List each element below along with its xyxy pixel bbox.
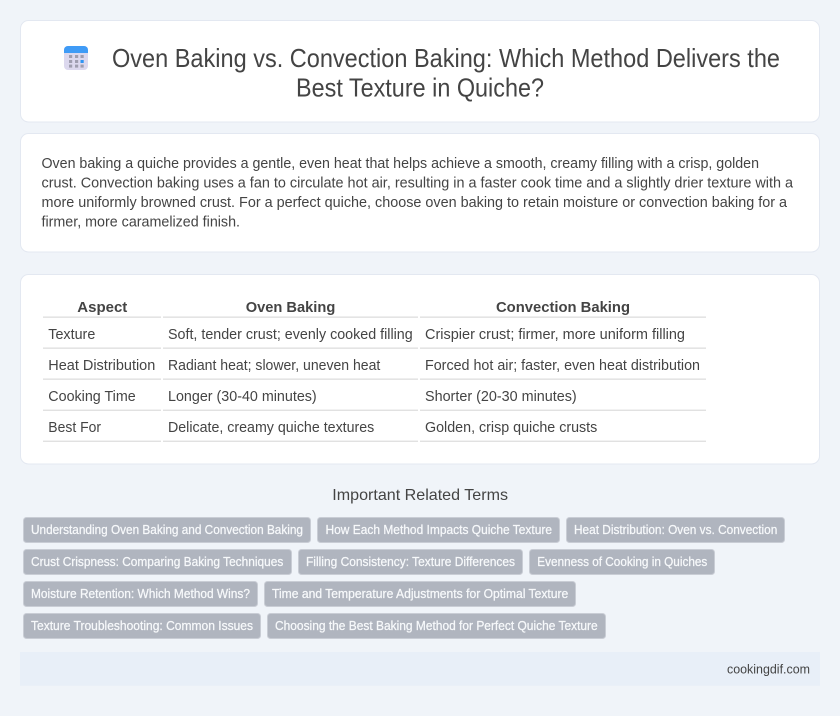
table header: Oven Baking: [246, 299, 335, 316]
table header: [77, 299, 630, 316]
chip row 2: Evenness of Cooking in Quiches: [537, 554, 707, 569]
chip row 1: How Each Method Impacts Quiche Texture: [326, 522, 552, 537]
row: heat distribution: Radiant heat; slower, uneven heat: [168, 358, 380, 374]
title: Best Texture in Quiche?: [296, 74, 544, 102]
related term chips: [24, 518, 784, 638]
row: best for: Delicate, creamy quiche textures: [168, 420, 374, 436]
chip row 3: Moisture Retention: Which Method Wins?: [31, 586, 250, 601]
chip row 4: Choosing the Best Baking Method for Perfect Quiche Texture: [275, 618, 598, 633]
panel: summary text: more uniformly browned crust. For a perfect quiche, choose oven baking to retain moisture or convection baking for a: [42, 195, 787, 211]
icon: calendar: [64, 46, 88, 70]
row: texture: Soft, tender crust; evenly cooked filling: [168, 327, 413, 343]
footer bar: cookingdif.com: [727, 661, 810, 676]
chip row 2: Filling Consistency: Texture Differences: [306, 554, 515, 569]
table header: Aspect: [77, 299, 127, 316]
row: cooking time: Longer (30-40 minutes): [168, 389, 317, 405]
chip row 3: [24, 582, 576, 606]
row: cooking time: Shorter (20-30 minutes): [425, 389, 577, 405]
heading: related terms: Important Related Terms: [332, 487, 508, 504]
panel: summary text: firmer, more caramelized finish.: [42, 214, 240, 230]
chip row 2: Crust Crispness: Comparing Baking Techniques: [31, 554, 283, 569]
row: heat distribution: Forced hot air; faster, even heat distribution: [425, 358, 700, 374]
row: best for: [48, 420, 597, 436]
row: cooking time: [48, 389, 577, 405]
row: heat distribution: Heat Distribution: [48, 358, 155, 374]
row: texture: [48, 327, 685, 343]
row: best for: Best For: [48, 420, 101, 436]
row: texture: Crispier crust; firmer, more uniform filling: [425, 327, 685, 343]
panel: summary text: Oven baking a quiche provides a gentle, even heat that helps achieve a smooth, creamy filling with a crisp, golden: [42, 156, 759, 172]
chip row 4: [24, 614, 606, 638]
title: Oven Baking vs. Convection Baking: Which Method Delivers the: [112, 45, 780, 73]
panel: summary text: crust. Convection baking uses a fan to circulate hot air, resulting in a faster cook time and a slightly drier texture with a: [42, 176, 793, 192]
panel: title header: [20, 20, 820, 122]
footer bar: [20, 652, 820, 686]
panel: summary text: [20, 134, 820, 252]
row: cooking time: Cooking Time: [48, 389, 136, 405]
table header: Convection Baking: [496, 299, 630, 316]
chip row 4: Texture Troubleshooting: Common Issues: [31, 618, 253, 633]
chip row 1: [24, 518, 784, 542]
chip row 2: [24, 550, 714, 574]
row: heat distribution: [48, 358, 700, 374]
title: [112, 45, 780, 102]
row: texture: Texture: [48, 327, 95, 343]
chip row 1: Understanding Oven Baking and Convection Baking: [31, 522, 303, 537]
row: best for: Golden, crisp quiche crusts: [425, 420, 597, 436]
chip row 3: Time and Temperature Adjustments for Optimal Texture: [272, 586, 568, 601]
panel: comparison table: [20, 274, 820, 464]
chip row 1: Heat Distribution: Oven vs. Convection: [574, 522, 777, 537]
